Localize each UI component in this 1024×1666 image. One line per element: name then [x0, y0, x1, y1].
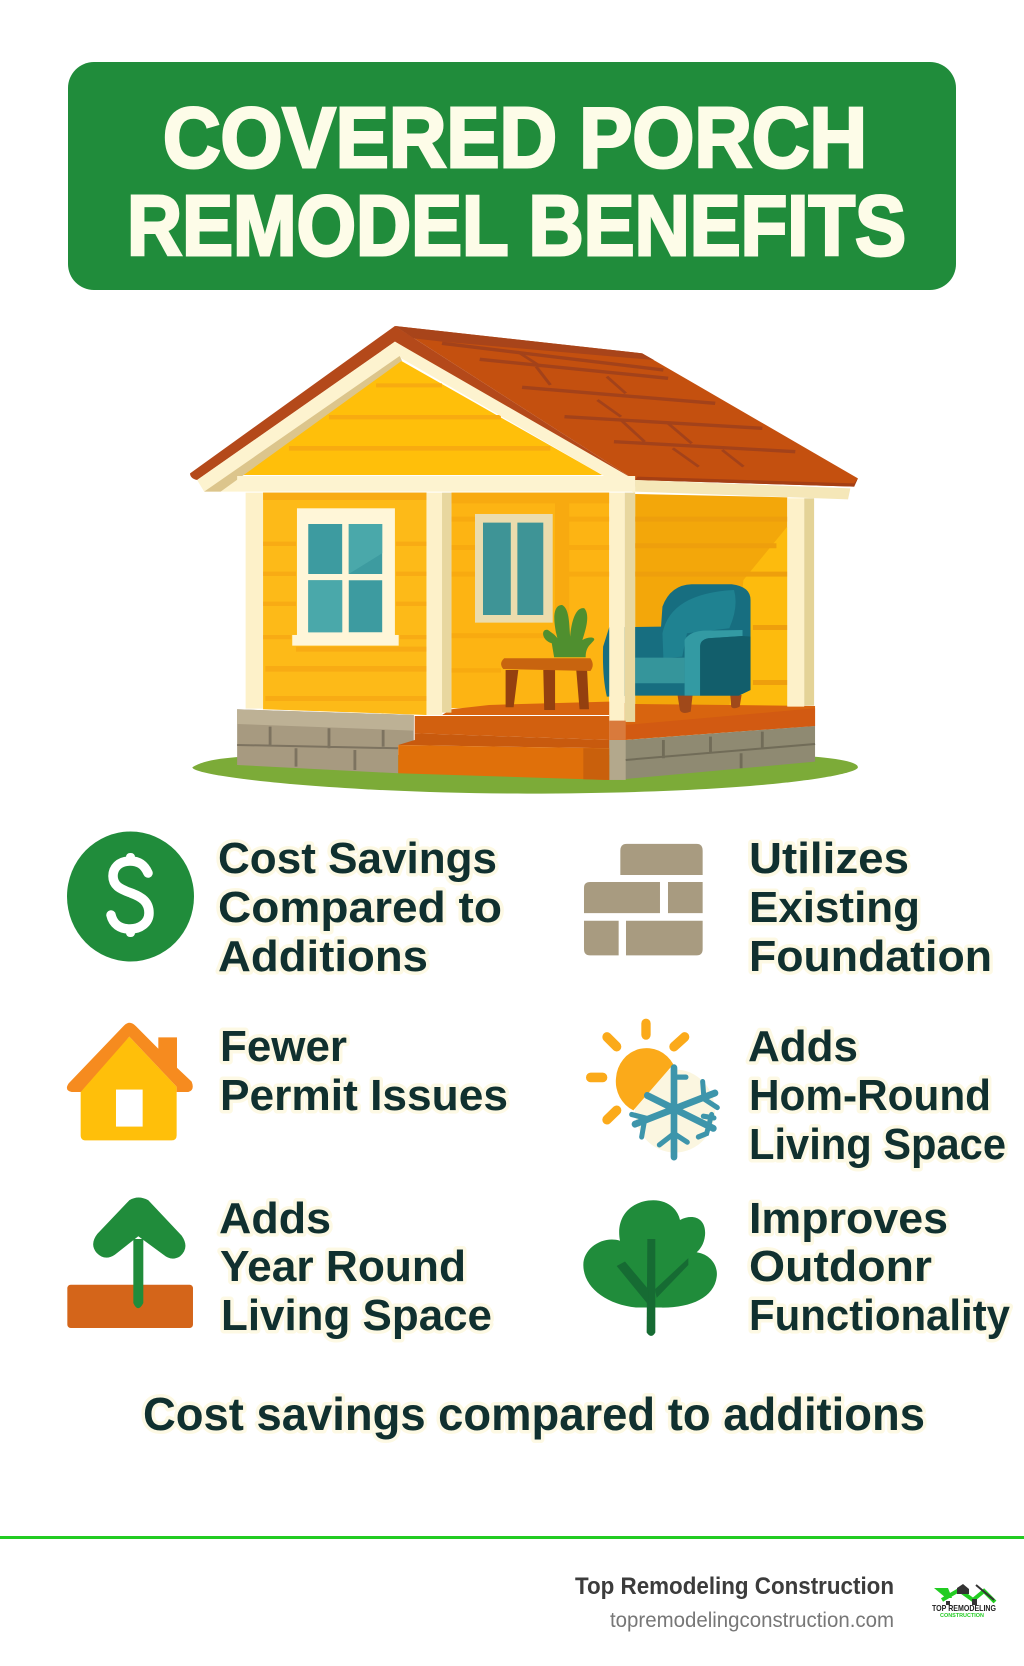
text: Year Round [220, 1242, 466, 1291]
footer: company name: Top Remodeling Construction [575, 1573, 894, 1600]
footer: logo: CONSTRUCTION [940, 1613, 984, 1619]
table [501, 658, 593, 710]
title text [127, 91, 906, 274]
benefit: improves outdoor functionality [583, 1194, 1010, 1340]
text: Permit Issues [220, 1071, 508, 1120]
footer: website: topremodelingconstruction.com [610, 1609, 894, 1632]
icon: tree [583, 1200, 717, 1336]
plant [543, 605, 594, 657]
footer: logo: TOP REMODELING [932, 1603, 996, 1613]
armchair [603, 584, 751, 713]
benefit: utilizes existing foundation [584, 834, 992, 981]
ground [192, 755, 858, 794]
window right [475, 514, 553, 623]
text: Hom-Round [749, 1071, 991, 1120]
gable trim [197, 342, 635, 493]
text: Adds [219, 1194, 331, 1243]
title banner [68, 62, 956, 290]
text: Fewer [220, 1022, 347, 1071]
text [219, 1194, 492, 1340]
text: Existing [749, 883, 920, 932]
illustration: house with covered porch [190, 326, 858, 794]
summary line: Cost savings compared to additions [143, 1388, 925, 1440]
text [749, 834, 992, 981]
text: Functionality [749, 1291, 1010, 1340]
text: Utilizes [749, 834, 909, 883]
text [749, 1194, 1010, 1340]
footer: logo [932, 1584, 996, 1619]
text: Cost Savings [218, 834, 497, 883]
text: Adds [748, 1022, 858, 1071]
gable wall [242, 360, 602, 475]
benefit: fewer permit issues [67, 1022, 508, 1140]
text: Outdonr [749, 1242, 932, 1291]
text: Compared to [218, 883, 502, 932]
text: Living Space [221, 1291, 492, 1340]
footer divider [0, 1536, 1024, 1539]
icon: bricks [584, 844, 703, 955]
stone foundation [237, 709, 815, 780]
back porch wall [451, 493, 609, 708]
title text: REMODEL BENEFITS [127, 179, 906, 274]
icon: sun and snowflake [591, 1023, 717, 1157]
porch steps [398, 708, 815, 780]
porch floor [442, 702, 815, 740]
text: Living Space [749, 1120, 1006, 1169]
icon: arrow over slab [67, 1198, 193, 1328]
text [218, 834, 502, 981]
posts [246, 493, 814, 722]
text: Additions [218, 932, 428, 981]
text [748, 1022, 1006, 1169]
text [220, 1022, 508, 1120]
text: Improves [749, 1194, 948, 1243]
benefit: adds hom-round living space [591, 1022, 1006, 1169]
right porch wall [635, 494, 787, 707]
roof [190, 326, 858, 487]
icon: house [67, 1023, 193, 1140]
icon: dollar coin [67, 832, 194, 962]
title text: COVERED PORCH [163, 91, 867, 186]
benefit: adds year round living space [67, 1194, 492, 1340]
left wall [263, 493, 426, 715]
window left [292, 508, 399, 646]
text: Foundation [749, 932, 992, 981]
benefit: cost savings [67, 832, 502, 981]
roof beam [237, 476, 635, 492]
